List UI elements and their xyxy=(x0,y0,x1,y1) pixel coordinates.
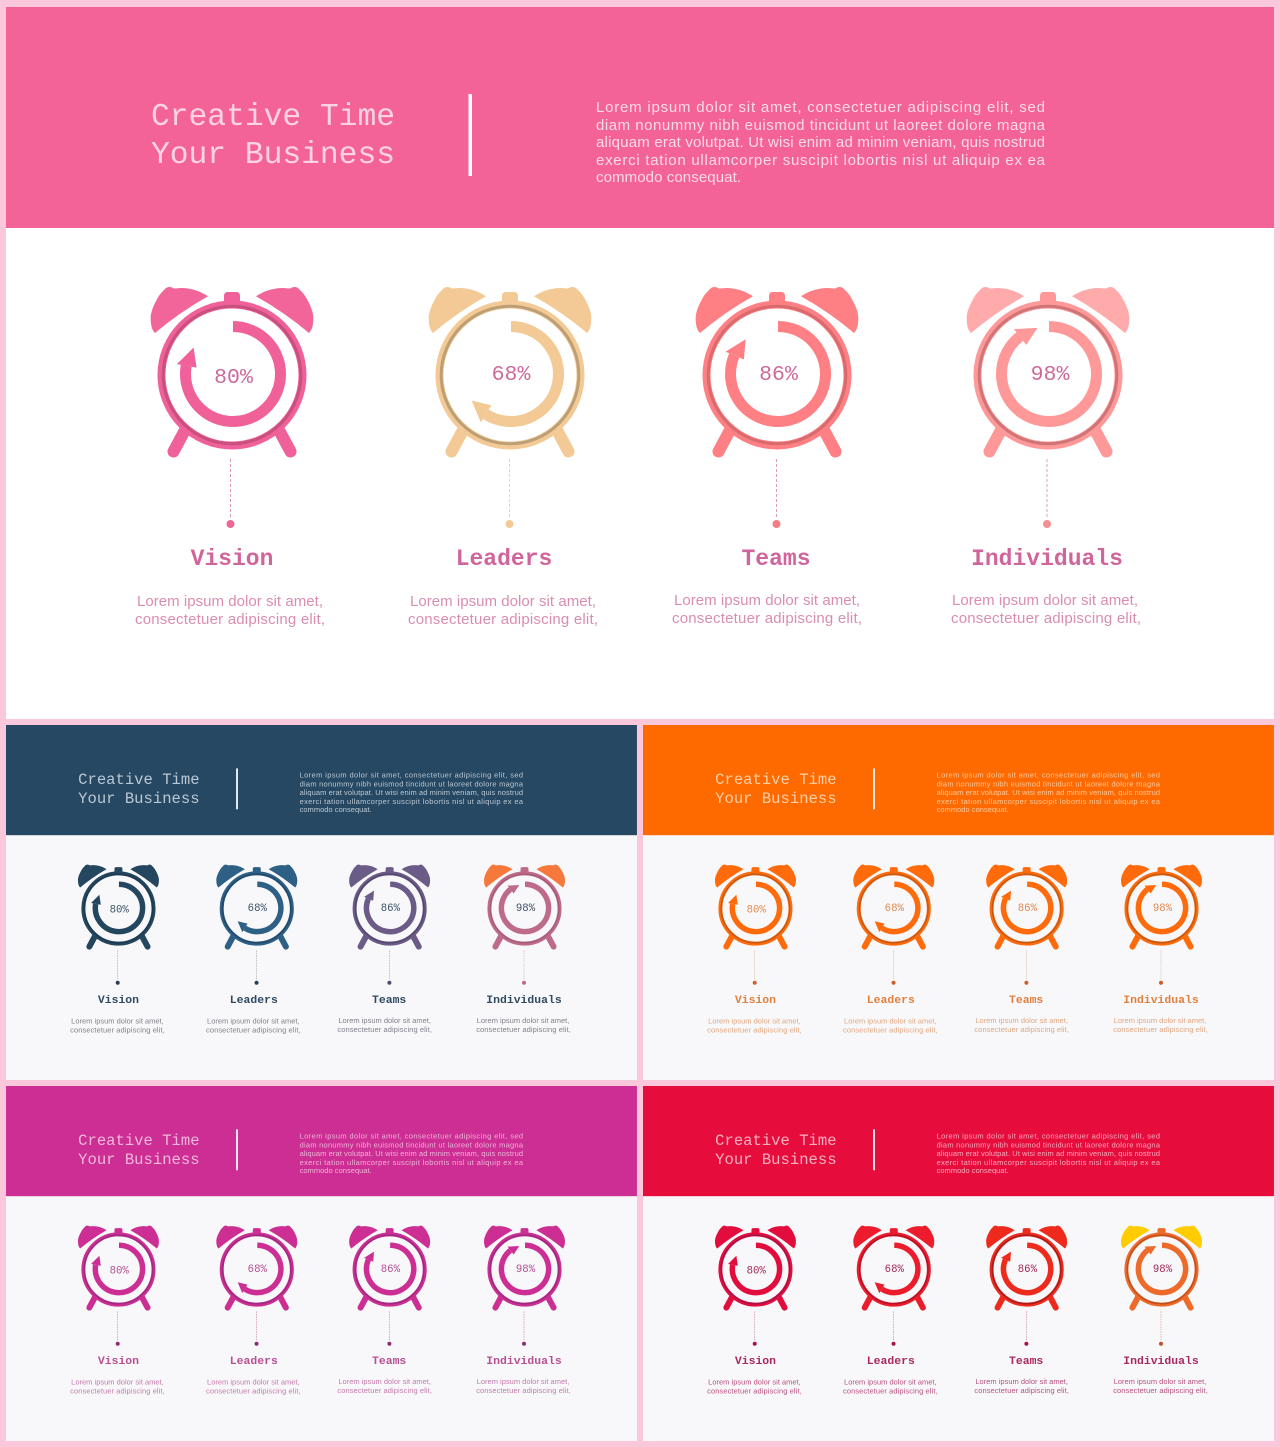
clock: Vision xyxy=(70,865,165,1035)
header paragraph: exerci tation ullamcorper suscipit lobortis nisl ut aliquip ex ea xyxy=(937,1158,1161,1167)
panel: orange slide xyxy=(643,725,1274,1080)
title: Your Business xyxy=(715,1151,837,1169)
clock: Leaders: consectetuer adipiscing elit, xyxy=(408,611,598,628)
title: Creative Time xyxy=(715,771,837,789)
header paragraph: diam nonummy nibh euismod tincidunt ut laoreet dolore magna xyxy=(596,117,1046,134)
title: Creative Time xyxy=(715,1132,837,1150)
clock: Teams: consectetuer adipiscing elit, xyxy=(672,610,862,627)
clock: Teams xyxy=(672,287,862,627)
clock: Leaders xyxy=(408,287,598,628)
clock: Leaders: Leaders xyxy=(456,546,552,572)
title xyxy=(151,100,395,173)
clock: Vision: Vision xyxy=(98,994,139,1007)
clock: Leaders: consectetuer adipiscing elit, xyxy=(206,1026,301,1035)
clock: Leaders: 68% xyxy=(248,903,267,915)
header paragraph: commodo consequat. xyxy=(596,169,741,186)
clock: Vision xyxy=(70,1226,165,1396)
header paragraph: aliquam erat volutpat. Ut wisi enim ad minim veniam, quis nostrud xyxy=(300,788,523,797)
clock: Vision: Vision xyxy=(98,1355,139,1368)
clock: Leaders: Lorem ipsum dolor sit amet, xyxy=(207,1378,300,1387)
clock: Vision: consectetuer adipiscing elit, xyxy=(135,611,325,628)
header band xyxy=(6,1086,637,1196)
header band xyxy=(6,7,1274,228)
header paragraph xyxy=(937,770,1161,814)
clock: Leaders: Leaders xyxy=(230,994,278,1007)
divider xyxy=(236,1129,238,1170)
title: Creative Time xyxy=(78,771,200,789)
title xyxy=(715,1132,837,1169)
clock: Individuals: consectetuer adipiscing elit, xyxy=(476,1025,571,1034)
panel: large pink slide xyxy=(6,7,1274,719)
clock: Teams: consectetuer adipiscing elit, xyxy=(974,1025,1069,1034)
clock: Individuals: Lorem ipsum dolor sit amet, xyxy=(477,1377,569,1386)
header paragraph: Lorem ipsum dolor sit amet, consectetuer adipiscing elit, sed xyxy=(596,99,1045,116)
clock: Leaders: 68% xyxy=(885,1264,904,1276)
clock: Teams: Lorem ipsum dolor sit amet, xyxy=(975,1016,1068,1025)
clock: Leaders xyxy=(843,865,938,1035)
clock: Teams: 86% xyxy=(759,363,798,387)
clock: Vision: Lorem ipsum dolor sit amet, xyxy=(708,1017,801,1026)
divider xyxy=(873,768,875,809)
title: Creative Time xyxy=(78,1132,200,1150)
title: Creative Time xyxy=(151,100,395,135)
header paragraph: Lorem ipsum dolor sit amet, consectetuer adipiscing elit, sed xyxy=(300,770,523,779)
clock: Teams: 86% xyxy=(381,1264,401,1276)
clock: Teams xyxy=(974,1226,1069,1395)
header paragraph: aliquam erat volutpat. Ut wisi enim ad minim veniam, quis nostrud xyxy=(937,1149,1160,1158)
panel: red slide xyxy=(643,1086,1274,1441)
clock: Leaders: 68% xyxy=(885,903,904,915)
clock: Leaders: Lorem ipsum dolor sit amet, xyxy=(207,1017,300,1026)
clock: Individuals xyxy=(1113,1226,1208,1395)
clock: Vision: Lorem ipsum dolor sit amet, xyxy=(708,1378,801,1387)
clock: Teams: consectetuer adipiscing elit, xyxy=(974,1386,1069,1395)
clock: Teams xyxy=(974,865,1069,1034)
header paragraph: exerci tation ullamcorper suscipit lobortis nisl ut aliquip ex ea xyxy=(300,797,524,806)
header paragraph xyxy=(300,770,524,814)
clock: Teams: Lorem ipsum dolor sit amet, xyxy=(674,592,860,609)
clock: Teams: consectetuer adipiscing elit, xyxy=(337,1386,432,1395)
title xyxy=(715,771,837,808)
header band xyxy=(6,725,637,835)
clock: Individuals: 98% xyxy=(516,903,536,915)
clock: Individuals: Lorem ipsum dolor sit amet, xyxy=(1114,1016,1206,1025)
clock: Leaders xyxy=(206,865,301,1035)
clock: Leaders: consectetuer adipiscing elit, xyxy=(206,1387,301,1396)
clock: Vision xyxy=(707,1226,802,1396)
clock: Individuals: 98% xyxy=(1153,1264,1173,1276)
clock: Vision: 80% xyxy=(214,366,253,390)
title: Your Business xyxy=(78,1151,200,1169)
clock: Vision: Lorem ipsum dolor sit amet, xyxy=(137,593,323,610)
header paragraph: exerci tation ullamcorper suscipit lobortis nisl ut aliquip ex ea xyxy=(937,797,1161,806)
clock: Individuals xyxy=(476,1226,571,1395)
header paragraph: Lorem ipsum dolor sit amet, consectetuer adipiscing elit, sed xyxy=(937,1131,1160,1140)
header paragraph: Lorem ipsum dolor sit amet, consectetuer adipiscing elit, sed xyxy=(300,1131,523,1140)
title: Your Business xyxy=(715,790,837,808)
header paragraph xyxy=(937,1131,1161,1175)
clock: Individuals: consectetuer adipiscing elit, xyxy=(476,1386,571,1395)
header band xyxy=(643,725,1274,835)
clock: Leaders: Leaders xyxy=(867,1355,915,1368)
clock: Individuals: 98% xyxy=(516,1264,536,1276)
clock: Teams: 86% xyxy=(1018,903,1038,915)
clock: Teams: Lorem ipsum dolor sit amet, xyxy=(975,1377,1068,1386)
header paragraph: aliquam erat volutpat. Ut wisi enim ad minim veniam, quis nostrud xyxy=(937,788,1160,797)
header paragraph: diam nonummy nibh euismod tincidunt ut laoreet dolore magna xyxy=(300,779,524,788)
clock: Individuals: Individuals xyxy=(486,994,562,1007)
divider xyxy=(468,94,472,176)
header paragraph: aliquam erat volutpat. Ut wisi enim ad minim veniam, quis nostrud xyxy=(596,134,1045,151)
clock: Leaders: 68% xyxy=(248,1264,267,1276)
clock: Individuals: Individuals xyxy=(486,1355,562,1368)
clock: Teams: 86% xyxy=(1018,1264,1038,1276)
divider xyxy=(236,768,238,809)
clock: Vision: consectetuer adipiscing elit, xyxy=(707,1026,802,1035)
clock: Teams: Teams xyxy=(1009,1355,1043,1368)
clock: Leaders xyxy=(206,1226,301,1396)
clock: Teams: Teams xyxy=(1009,994,1043,1007)
clock: Teams: consectetuer adipiscing elit, xyxy=(337,1025,432,1034)
clock: Vision: 80% xyxy=(110,1265,129,1277)
clock: Individuals: 98% xyxy=(1031,363,1069,387)
clock: Leaders xyxy=(843,1226,938,1396)
clock: Individuals xyxy=(1113,865,1208,1034)
header paragraph: commodo consequat. xyxy=(937,1166,1009,1175)
clock: Teams: Teams xyxy=(372,994,406,1007)
header paragraph: aliquam erat volutpat. Ut wisi enim ad minim veniam, quis nostrud xyxy=(300,1149,523,1158)
clock: Vision: consectetuer adipiscing elit, xyxy=(70,1026,165,1035)
clock: Vision: Vision xyxy=(735,1355,776,1368)
header paragraph: commodo consequat. xyxy=(300,1166,372,1175)
clock: Leaders: consectetuer adipiscing elit, xyxy=(843,1387,938,1396)
clock: Vision xyxy=(135,287,325,628)
header paragraph: commodo consequat. xyxy=(937,805,1009,814)
header paragraph: commodo consequat. xyxy=(300,805,372,814)
clock: Individuals: consectetuer adipiscing elit, xyxy=(1113,1025,1208,1034)
clock: Vision: 80% xyxy=(747,904,766,916)
clock: Teams xyxy=(337,1226,432,1395)
clock: Individuals xyxy=(476,865,571,1034)
clock: Individuals xyxy=(951,287,1141,627)
clock: Individuals: Lorem ipsum dolor sit amet, xyxy=(1114,1377,1206,1386)
clock: Individuals: Lorem ipsum dolor sit amet, xyxy=(952,592,1138,609)
header paragraph: diam nonummy nibh euismod tincidunt ut laoreet dolore magna xyxy=(300,1140,524,1149)
clock: Individuals: Individuals xyxy=(971,546,1123,572)
clock: Leaders: 68% xyxy=(492,363,530,387)
clock: Leaders: Lorem ipsum dolor sit amet, xyxy=(410,593,596,610)
header paragraph: Lorem ipsum dolor sit amet, consectetuer adipiscing elit, sed xyxy=(937,770,1160,779)
clock: Individuals: Individuals xyxy=(1123,994,1199,1007)
header paragraph xyxy=(300,1131,524,1175)
header paragraph xyxy=(596,99,1046,186)
panel: magenta slide xyxy=(6,1086,637,1441)
clock: Teams: 86% xyxy=(381,903,401,915)
clock: Teams xyxy=(337,865,432,1034)
divider xyxy=(873,1129,875,1170)
header paragraph: exerci tation ullamcorper suscipit lobortis nisl ut aliquip ex ea xyxy=(300,1158,524,1167)
title: Your Business xyxy=(151,138,395,173)
clock: Vision: Lorem ipsum dolor sit amet, xyxy=(71,1378,164,1387)
clock: Teams: Lorem ipsum dolor sit amet, xyxy=(338,1016,431,1025)
header paragraph: diam nonummy nibh euismod tincidunt ut laoreet dolore magna xyxy=(937,779,1161,788)
title xyxy=(78,771,200,808)
clock: Leaders: Lorem ipsum dolor sit amet, xyxy=(844,1378,937,1387)
clock: Individuals: Lorem ipsum dolor sit amet, xyxy=(477,1016,569,1025)
clock: Vision: Vision xyxy=(191,546,273,572)
clock: Teams: Teams xyxy=(741,546,811,572)
clock: Vision: consectetuer adipiscing elit, xyxy=(70,1387,165,1396)
clock: Leaders: Lorem ipsum dolor sit amet, xyxy=(844,1017,937,1026)
header band xyxy=(643,1086,1274,1196)
clock: Teams: Teams xyxy=(372,1355,406,1368)
clock: Leaders: consectetuer adipiscing elit, xyxy=(843,1026,938,1035)
title: Your Business xyxy=(78,790,200,808)
header paragraph: exerci tation ullamcorper suscipit lobortis nisl ut aliquip ex ea xyxy=(596,152,1046,169)
clock: Individuals: consectetuer adipiscing elit, xyxy=(951,610,1141,627)
clock: Teams: Lorem ipsum dolor sit amet, xyxy=(338,1377,431,1386)
panel: navy slide xyxy=(6,725,637,1080)
clock: Leaders: Leaders xyxy=(230,1355,278,1368)
clock: Vision: 80% xyxy=(110,904,129,916)
title xyxy=(78,1132,200,1169)
header paragraph: diam nonummy nibh euismod tincidunt ut laoreet dolore magna xyxy=(937,1140,1161,1149)
clock: Individuals: Individuals xyxy=(1123,1355,1199,1368)
clock: Vision: Lorem ipsum dolor sit amet, xyxy=(71,1017,164,1026)
clock: Individuals: consectetuer adipiscing elit, xyxy=(1113,1386,1208,1395)
clock: Vision: 80% xyxy=(747,1265,766,1277)
clock: Individuals: 98% xyxy=(1153,903,1173,915)
clock: Leaders: Leaders xyxy=(867,994,915,1007)
clock: Vision: Vision xyxy=(735,994,776,1007)
clock: Vision xyxy=(707,865,802,1035)
clock: Vision: consectetuer adipiscing elit, xyxy=(707,1387,802,1396)
